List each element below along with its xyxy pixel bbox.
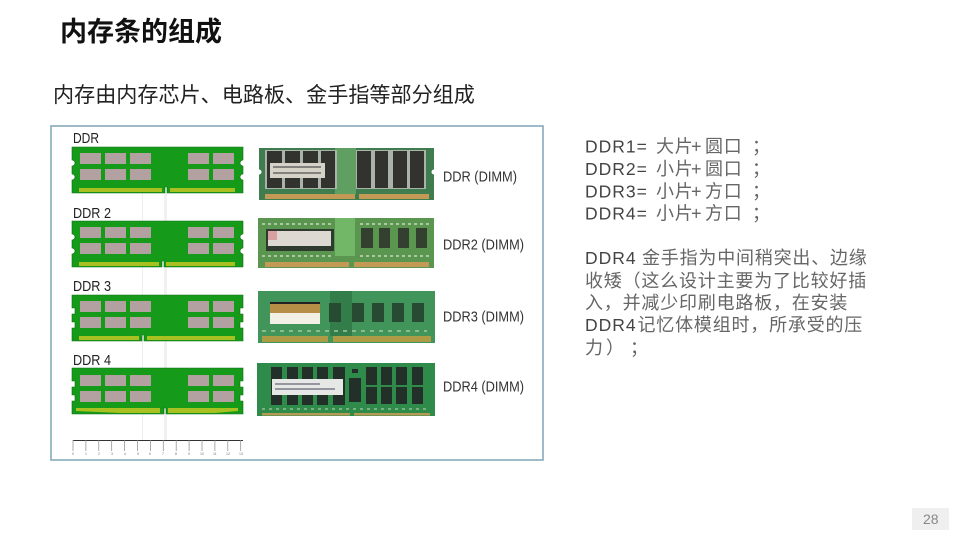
page number xyxy=(912,508,949,530)
ruler: 12 xyxy=(226,452,230,456)
diagram: DDR 3 module: DDR 3 xyxy=(73,279,111,295)
diagram: DDR 4 module: DDR 4 xyxy=(73,353,111,369)
ruler: 5 xyxy=(137,452,139,456)
text block: DDR generations: DDR3= xyxy=(585,182,648,202)
ruler xyxy=(72,440,243,456)
ruler: 13 xyxy=(239,452,243,456)
text block: DDR generations: 圆口 xyxy=(705,159,743,179)
ruler: 6 xyxy=(149,452,151,456)
text block: DDR generations: DDR2= xyxy=(585,159,648,179)
text block: DDR generations: ； xyxy=(752,136,771,156)
ruler: 0 xyxy=(72,452,74,456)
text block: DDR4 gold finger note: DDR4 xyxy=(585,248,637,268)
text block: DDR4 gold finger note: DDR4 xyxy=(585,315,637,335)
diagram: DDR module: DDR xyxy=(73,131,99,147)
text block: DDR generations: + xyxy=(691,204,702,224)
ruler: 3 xyxy=(111,452,113,456)
text block: DDR generations: DDR1= xyxy=(585,136,648,156)
text block: DDR4 gold finger note: 收矮（这么设计主要为了比较好插 xyxy=(585,271,867,291)
text block: DDR generations: + xyxy=(691,159,702,179)
diagram: DDR module xyxy=(72,131,243,193)
text block: DDR generations: 大片 xyxy=(656,136,694,156)
ruler: 8 xyxy=(175,452,177,456)
ruler: 1 xyxy=(85,452,87,456)
photo: DDR4 stick xyxy=(257,363,435,416)
ruler: 11 xyxy=(213,452,217,456)
text block: DDR generations: 小片 xyxy=(656,159,694,179)
text block: DDR generations: DDR4= xyxy=(585,204,648,224)
diagram: DDR 2 module: DDR 2 xyxy=(73,206,111,222)
panel: DDR comparison figure xyxy=(51,126,543,460)
subtitle: 内存由内存芯片、电路板、金手指等部分组成 xyxy=(53,83,475,107)
text block: DDR4 gold finger note: ） xyxy=(606,338,625,358)
label: DDR4 (DIMM): DDR4 (DIMM) xyxy=(443,380,524,396)
page number: 28 xyxy=(923,511,939,527)
text block: DDR generations: 方口 xyxy=(705,182,743,202)
ruler: 7 xyxy=(162,452,164,456)
text block: DDR generations: 方口 xyxy=(705,204,743,224)
text block: DDR4 gold finger note: 记忆体模组时，所承受的压 xyxy=(638,315,863,335)
text block: DDR generations: + xyxy=(691,136,702,156)
photo: DDR3 stick xyxy=(258,291,435,343)
text block: DDR generations: ； xyxy=(752,182,771,202)
ruler: 9 xyxy=(188,452,190,456)
text block: DDR4 gold finger note: 金手指为中间稍突出、边缘 xyxy=(642,248,868,268)
text block: DDR4 gold finger note: ； xyxy=(630,338,649,358)
label: DDR (DIMM): DDR (DIMM) xyxy=(443,170,517,186)
photo: DDR stick xyxy=(256,148,436,200)
diagram: DDR 2 module xyxy=(72,206,243,267)
ruler: 10 xyxy=(200,452,204,456)
text block: DDR4 gold finger note: 入，并减少印刷电路板，在安装 xyxy=(585,293,848,313)
photo: DDR2 stick xyxy=(258,218,434,268)
label: DDR3 (DIMM): DDR3 (DIMM) xyxy=(443,310,524,326)
text block: DDR4 gold finger note: 力 xyxy=(585,338,604,358)
diagram: DDR 3 module xyxy=(72,279,243,341)
text block: DDR generations: ； xyxy=(752,159,771,179)
text block: DDR generations: 小片 xyxy=(656,182,694,202)
text block: DDR generations: ； xyxy=(752,204,771,224)
text block: DDR generations: 小片 xyxy=(656,204,694,224)
diagram: DDR 4 module xyxy=(72,353,243,414)
text block: DDR4 gold finger note xyxy=(585,248,868,358)
label: DDR2 (DIMM): DDR2 (DIMM) xyxy=(443,238,524,254)
text block: DDR generations: + xyxy=(691,182,702,202)
text block: DDR generations xyxy=(585,136,771,224)
ruler: 4 xyxy=(124,452,126,456)
text block: DDR generations: 圆口 xyxy=(705,136,743,156)
title: 内存条的组成 xyxy=(60,17,222,47)
ruler: 2 xyxy=(98,452,100,456)
